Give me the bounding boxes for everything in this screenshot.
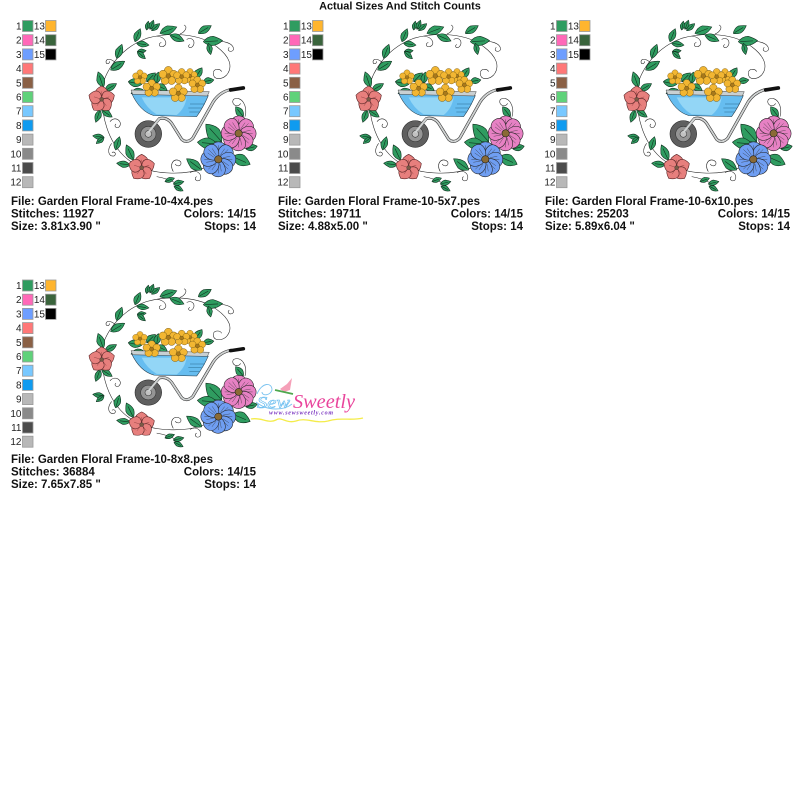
design details text: Size: 5.89x6.04 " [545, 221, 635, 233]
colour legend: 10 [544, 149, 556, 160]
colour legend: 3 [550, 50, 556, 61]
design details text: Size: 3.81x3.90 " [11, 221, 101, 233]
colour legend: 14 [34, 295, 45, 306]
panel: 6x10 design [544, 19, 793, 233]
colour legend: 11 [545, 164, 556, 174]
colour legend: 12 [277, 178, 289, 189]
colour legend [10, 20, 56, 189]
design details text: File: Garden Floral Frame-10-5x7.pes [278, 196, 480, 208]
colour legend: 14 [301, 36, 312, 47]
colour legend: 13 [568, 22, 579, 32]
colour legend: 14 [34, 36, 45, 47]
watermark: Sew Sweetly logo: Sew [257, 393, 291, 412]
design details text [11, 196, 257, 233]
design details text: Stitches: 19711 [278, 208, 362, 220]
colour legend: 4 [16, 64, 22, 75]
watermark: Sew Sweetly logo [251, 378, 363, 422]
design details text: Size: 4.88x5.00 " [278, 221, 368, 233]
colour legend: 4 [550, 64, 556, 75]
colour legend [10, 280, 56, 448]
design details text: Colors: 14/15 [184, 466, 257, 478]
colour legend: 11 [278, 164, 289, 174]
wreath and wheelbarrow artwork [87, 19, 258, 193]
design details text: File: Garden Floral Frame-10-4x4.pes [11, 196, 213, 208]
colour legend: 3 [283, 50, 289, 61]
watermark: Sew Sweetly logo: www.sewsweetly.com [269, 410, 333, 416]
colour legend: 9 [16, 135, 22, 146]
colour legend: 11 [11, 423, 22, 434]
design details text: Colors: 14/15 [184, 208, 257, 220]
design details text: Stops: 14 [204, 221, 257, 233]
colour legend: 4 [283, 64, 289, 75]
colour legend: 2 [16, 295, 22, 306]
colour legend: 10 [10, 149, 22, 160]
colour legend: 1 [16, 22, 22, 32]
colour legend: 2 [550, 36, 556, 47]
colour legend: 10 [10, 409, 22, 420]
design details text: File: Garden Floral Frame-10-6x10.pes [545, 196, 753, 208]
colour legend: 15 [34, 50, 45, 61]
colour legend: 7 [283, 107, 289, 118]
colour legend: 9 [550, 135, 556, 146]
colour legend [277, 20, 323, 189]
title: Actual Sizes And Stitch Counts [319, 0, 481, 12]
colour legend: 15 [34, 309, 45, 320]
colour legend: 2 [16, 36, 22, 47]
colour legend: 2 [283, 36, 289, 47]
design details text: Stops: 14 [204, 479, 257, 491]
colour legend: 1 [16, 281, 22, 292]
colour legend: 1 [550, 22, 556, 32]
colour legend: 8 [550, 121, 556, 132]
colour legend: 9 [283, 135, 289, 146]
design details text: Stops: 14 [738, 221, 791, 233]
colour legend: 12 [10, 437, 22, 448]
colour legend: 6 [550, 92, 556, 104]
colour legend: 13 [34, 281, 45, 292]
colour legend: 8 [16, 121, 22, 132]
colour legend: 9 [16, 395, 22, 406]
design details text: Stitches: 11927 [11, 208, 94, 220]
wreath and wheelbarrow artwork [87, 283, 258, 449]
colour legend: 5 [16, 78, 22, 89]
colour legend: 5 [550, 78, 556, 89]
colour legend: 4 [16, 324, 22, 335]
colour legend: 7 [550, 107, 556, 118]
colour legend: 13 [301, 22, 312, 32]
design details text: Size: 7.65x7.85 " [11, 479, 101, 491]
design details text: Colors: 14/15 [451, 208, 524, 220]
design details text: Stitches: 36884 [11, 466, 95, 478]
panel: 8x8 design [10, 280, 363, 491]
colour legend: 7 [16, 366, 22, 377]
colour legend: 15 [301, 50, 312, 61]
colour legend: 3 [16, 309, 22, 320]
design details text: Stitches: 25203 [545, 208, 629, 220]
design details text: Stops: 14 [471, 221, 524, 233]
panel: 5x7 design [277, 19, 525, 233]
panel: 4x4 design [10, 19, 258, 233]
wreath and wheelbarrow artwork [354, 19, 525, 193]
colour legend: 12 [544, 178, 556, 189]
design details text [545, 196, 791, 233]
wreath and wheelbarrow artwork [622, 19, 793, 193]
colour legend: 15 [568, 50, 579, 61]
colour legend: 1 [283, 22, 289, 32]
colour legend: 10 [277, 149, 289, 160]
colour legend: 8 [16, 380, 22, 391]
colour legend: 6 [16, 92, 22, 104]
colour legend: 13 [34, 22, 45, 32]
colour legend: 6 [283, 92, 289, 104]
design details text [278, 196, 524, 233]
colour legend: 3 [16, 50, 22, 61]
design details text [11, 454, 257, 491]
colour legend: 6 [16, 352, 22, 363]
colour legend: 7 [16, 107, 22, 118]
design details text: File: Garden Floral Frame-10-8x8.pes [11, 454, 213, 466]
colour legend: 8 [283, 121, 289, 132]
watermark: Sew Sweetly logo: Sweetly [293, 391, 355, 413]
colour legend [544, 20, 590, 189]
colour legend: 11 [11, 164, 22, 174]
colour legend: 5 [283, 78, 289, 89]
design details text: Colors: 14/15 [718, 208, 791, 220]
colour legend: 12 [10, 178, 22, 189]
colour legend: 14 [568, 36, 579, 47]
colour legend: 5 [16, 338, 22, 349]
